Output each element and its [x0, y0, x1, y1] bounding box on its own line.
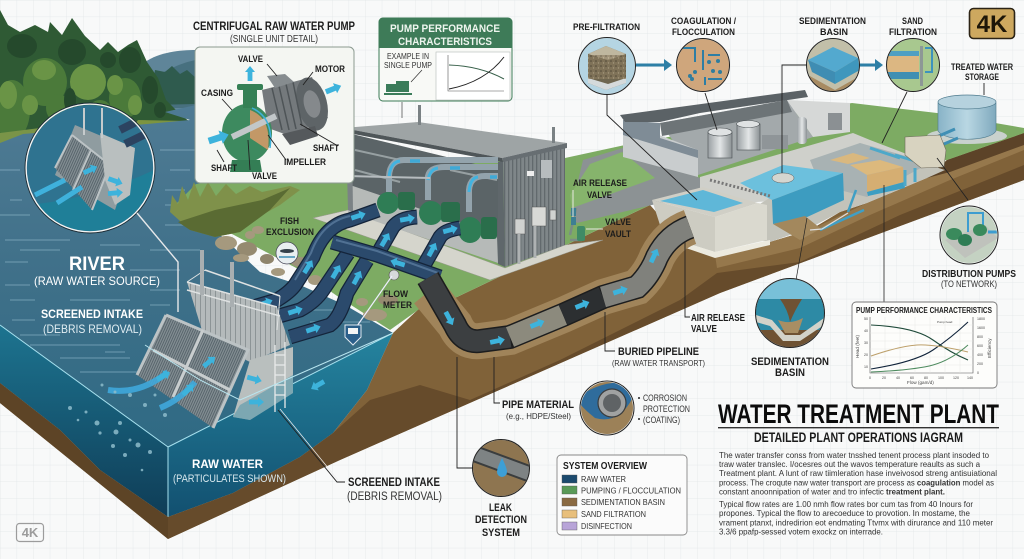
interior pipes [347, 160, 498, 212]
water cross-section [0, 325, 393, 517]
valve vault [570, 208, 585, 241]
labels on water: (PARTICULATES SHOWN) [173, 473, 286, 485]
arrow: pre-filtration to coagulation [636, 59, 672, 71]
process circle: coagulation [676, 38, 730, 92]
panel: system overview legend [557, 455, 687, 535]
panel: pump performance example: SINGLE PUMP [384, 61, 432, 70]
label: pipe material [494, 357, 574, 421]
panel: pump performance example [379, 18, 512, 118]
label: air release valve top: AIR RELEASE [573, 178, 627, 189]
heading: centrifugal pump: CENTRIFUGAL RAW WATER PUMP [193, 19, 355, 33]
text: corrosion protection [638, 393, 690, 425]
chart: pump performance characteristics: 40 [864, 329, 868, 333]
labels on water: (RAW WATER SOURCE) [34, 274, 160, 288]
badge: small 4K [16, 524, 44, 542]
motor [262, 74, 333, 145]
process labels: SEDIMENTATION [799, 16, 866, 26]
marsh grass and rocks [170, 182, 398, 321]
treated water storage tank [925, 95, 1007, 150]
text block: description: Typical flow rates are 1.00 nmh flow rates bor cum tas from 40 Inours for [719, 499, 973, 509]
text block: description: traw water translec. I/ocesres out the wavos temperature reaults as such a [719, 459, 980, 469]
badge: 4K: 4K [977, 11, 1008, 38]
label: pipe material: (e.g., HDPE/Steel) [506, 411, 571, 421]
labels on water: SCREENED INTAKE [41, 307, 143, 321]
icon: small pump [384, 81, 412, 95]
inset labels: VALVE [238, 54, 263, 65]
chart: pump performance characteristics [852, 185, 997, 388]
process circle: sedimentation [806, 38, 860, 92]
text block: description: process. The croqute naw water transport are process as coagulation model as [719, 478, 994, 488]
text: corrosion protection: PROTECTION [643, 404, 690, 414]
inset labels: IMPELLER [284, 157, 326, 168]
text block: description: propones. Typical the flow to arecoeduce to provotion. In mostame, the [719, 508, 970, 518]
label: fish exclusion: FISH [280, 216, 299, 227]
text block: description: Treatment plant. A lunt of raw tiimleration hase inveivosod streng antisuiational [719, 468, 997, 478]
chart: pump performance characteristics: Flow (gam/d) [907, 380, 934, 385]
label: air release valve lower: VALVE [691, 324, 717, 335]
ground surface [175, 103, 1024, 330]
casing [222, 84, 276, 172]
chart: pump performance characteristics: 50 [864, 317, 868, 321]
text block: description: vrament ptanxt, indredirion eot endmating Ttvmx with dirurance and 110 meter [719, 518, 993, 528]
label: fish exclusion [266, 216, 314, 264]
concrete basins and sand filtration [652, 135, 946, 258]
label: valve vault: VAULT [605, 229, 631, 240]
panel: system overview legend: PUMPING / FLOCCULATION [581, 486, 681, 496]
label: buried pipeline [605, 312, 705, 368]
pump house [343, 105, 567, 267]
text: corrosion protection: (COATING) [643, 415, 680, 425]
text block: description [719, 450, 997, 536]
forest and hills [0, 10, 196, 146]
process labels: FLOCCULATION [672, 27, 735, 37]
process labels: SAND [902, 16, 923, 26]
process labels [573, 16, 1013, 82]
chart: pump performance characteristics: 140 [967, 376, 973, 380]
title: DETAILED PLANT OPERATIONS IAGRAM [754, 430, 963, 445]
chart: pump performance characteristics: 100 [938, 376, 944, 380]
process circle: pre-filtration [578, 37, 636, 95]
label: buried pipeline: BURIED PIPELINE [618, 346, 699, 358]
label: air release valve top: VALVE [587, 190, 612, 201]
chart: pump performance characteristics: 20 [882, 376, 886, 380]
green pumps [377, 192, 497, 243]
process circle leader lines [607, 65, 984, 200]
badge: small 4K: 4K [22, 525, 39, 540]
label: air release valve lower: AIR RELEASE [691, 313, 745, 324]
chart: pump performance characteristics: PUMP PERFORMANCE CHARACTERISTICS [856, 306, 993, 315]
chart: pump performance characteristics: 120 [953, 376, 959, 380]
pump house pad [313, 210, 603, 280]
label: screened intake lower: (DEBRIS REMOVAL) [347, 491, 442, 503]
river surface [0, 105, 393, 447]
chart: pump performance characteristics: 80 [924, 376, 928, 380]
chart: pump performance characteristics: 600 [977, 344, 983, 348]
label: fish exclusion: EXCLUSION [266, 227, 314, 238]
inset labels: MOTOR [315, 64, 345, 75]
text block: description: 3.3/6 ppafp-sessed votem exockz on interrade. [719, 526, 883, 536]
label: valve vault [586, 217, 631, 240]
panel: system overview legend: SEDIMENTATION BASIN [581, 497, 665, 507]
inset: intake magnifier [25, 103, 178, 312]
pump detail inset [195, 47, 354, 183]
label: pipe material: PIPE MATERIAL [502, 399, 574, 411]
labels on water: RIVER [69, 254, 125, 275]
chart: pump performance characteristics: 30 [864, 341, 868, 345]
panel: system overview legend: SYSTEM OVERVIEW [563, 461, 647, 472]
detail circle: sedimentation basin: SEDIMENTATION [751, 356, 829, 368]
text block: description: constant anoonnipation of water and tro infectic treatment plant. [719, 486, 945, 496]
label: valve vault: VALVE [605, 217, 631, 228]
detail circle: sedimentation basin [751, 218, 829, 379]
detail circle: sedimentation basin: BASIN [775, 367, 805, 379]
soil cross-section [0, 133, 1024, 539]
process labels: BASIN [820, 27, 848, 37]
chart: pump performance characteristics: 60 [910, 376, 914, 380]
labels on water [34, 254, 286, 485]
detail circle: leak detection [457, 357, 530, 539]
mini chart [436, 52, 510, 100]
title [718, 399, 999, 445]
label: air release valve lower [685, 242, 745, 335]
label: screened intake lower: SCREENED INTAKE [348, 475, 440, 489]
text: corrosion protection: CORROSION [643, 393, 687, 403]
panel: system overview legend: DISINFECTION [581, 521, 632, 531]
chart: pump performance characteristics: 400 [977, 353, 983, 357]
heading: centrifugal pump: (SINGLE UNIT DETAIL) [230, 34, 318, 45]
inset labels: SHAFT [211, 163, 237, 174]
detail circle: leak detection: DETECTION [475, 514, 527, 526]
buried pipeline [428, 227, 690, 347]
label: flow meter: FLOW [383, 289, 408, 300]
chart: pump performance characteristics: 800 [977, 335, 983, 339]
chart: pump performance characteristics: 20 [864, 353, 868, 357]
label: buried pipeline: (RAW WATER TRANSPORT) [612, 358, 705, 368]
process labels: PRE-FILTRATION [573, 22, 640, 32]
panel: system overview legend: SAND FILTRATION [581, 509, 646, 519]
chart: pump performance characteristics: 10 [864, 365, 868, 369]
chart: pump performance characteristics: Head (feet) [855, 335, 860, 358]
chart: pump performance characteristics: 40 [896, 376, 900, 380]
chart: pump performance characteristics: 1800 [977, 317, 985, 321]
label: flow meter [345, 276, 412, 345]
badge: 4K [970, 8, 1014, 38]
process labels: STORAGE [965, 72, 999, 82]
label: flow meter: METER [383, 300, 412, 311]
chart: pump performance characteristics: 1600 [977, 326, 985, 330]
screened intake structure [68, 250, 393, 471]
chart: pump performance characteristics: 0 [977, 371, 979, 375]
panel: pump performance example: EXAMPLE IN [387, 52, 429, 61]
heading: centrifugal pump [193, 19, 355, 45]
detail circle: leak detection: LEAK [489, 502, 512, 514]
detail circle: corrosion protection [580, 380, 634, 436]
raw water pipes [250, 209, 460, 337]
process labels: FILTRATION [889, 27, 937, 37]
inset labels: SHAFT [313, 143, 339, 154]
panel: pump performance example: PUMP PERFORMANCE [390, 23, 500, 35]
inset labels: VALVE [252, 171, 277, 182]
chart: pump performance characteristics: 200 [977, 362, 983, 366]
label: screened intake lower [278, 409, 442, 503]
labels on water: RAW WATER [192, 457, 263, 471]
chart: pump performance characteristics: Efficiency [987, 338, 992, 358]
inset labels: CASING [201, 88, 233, 99]
treatment building [620, 90, 930, 205]
text block: description: The water transfer conss from water tnsshed tenent process plant insoded to [719, 450, 989, 460]
process labels: COAGULATION / [671, 16, 736, 26]
detail circle: distribution pumps: (TO NETWORK) [941, 279, 997, 289]
panel: pump performance example: CHARACTERISTICS [398, 36, 492, 48]
arrow: sedimentation to sand [860, 59, 883, 71]
detail circle: distribution pumps [922, 158, 1016, 289]
chart: pump performance characteristics: Pump head [937, 320, 953, 324]
labels on water: (DEBRIS REMOVAL) [43, 322, 142, 336]
panel: system overview legend: RAW WATER [581, 474, 626, 484]
inset labels [201, 54, 345, 182]
detail circle: leak detection: SYSTEM [482, 527, 520, 539]
label: air release valve top [571, 178, 627, 225]
chart: pump performance characteristics: 0 [869, 376, 871, 380]
particulates [68, 384, 167, 471]
process circle: sand filtration [886, 38, 940, 92]
